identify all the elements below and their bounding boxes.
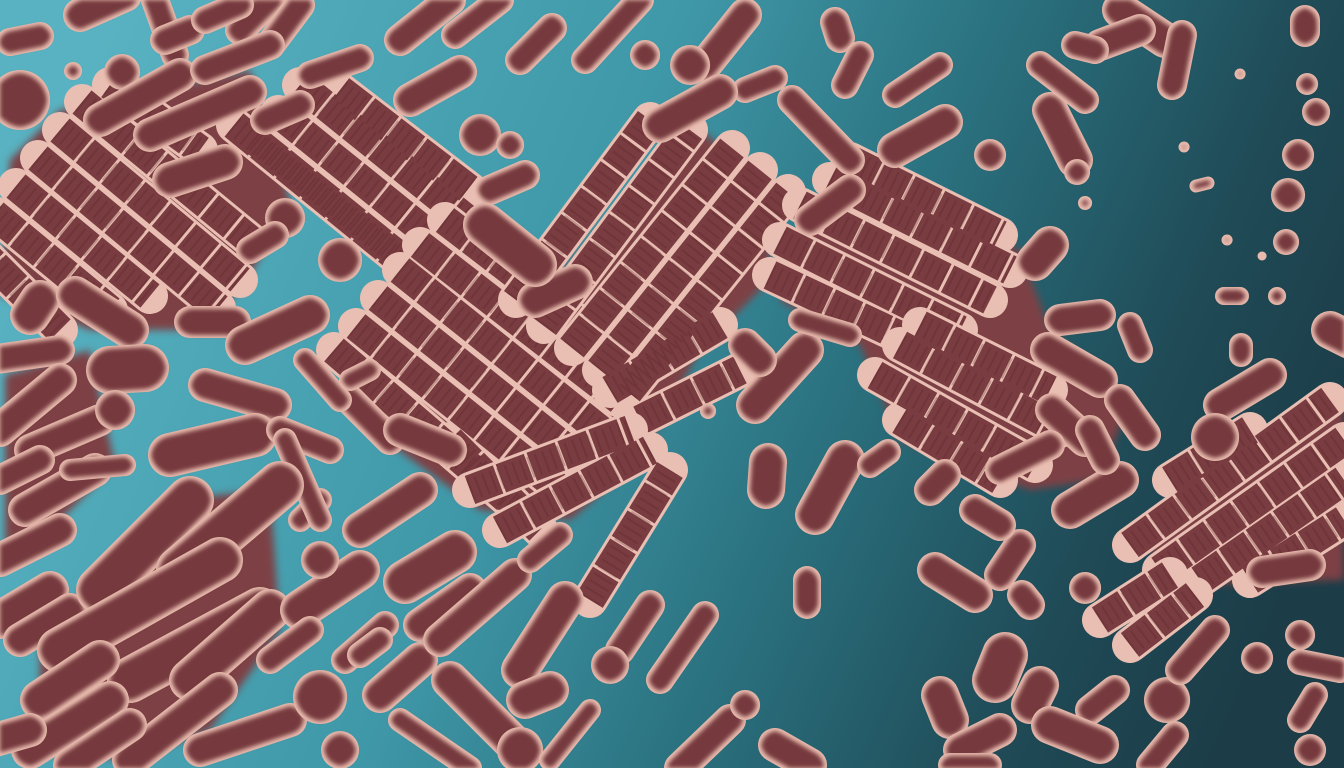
right side bacteria	[1000, 245, 1344, 510]
lower left bacteria	[0, 485, 455, 765]
bacteria grid clusters	[0, 85, 1344, 645]
centre floating bacteria	[708, 320, 1085, 605]
upper right bacteria	[1040, 10, 1316, 355]
lower right bacteria	[775, 565, 1340, 765]
left middle bacteria	[0, 218, 450, 560]
top bacteria	[10, 0, 990, 300]
centre bottom bacteria	[320, 535, 745, 768]
